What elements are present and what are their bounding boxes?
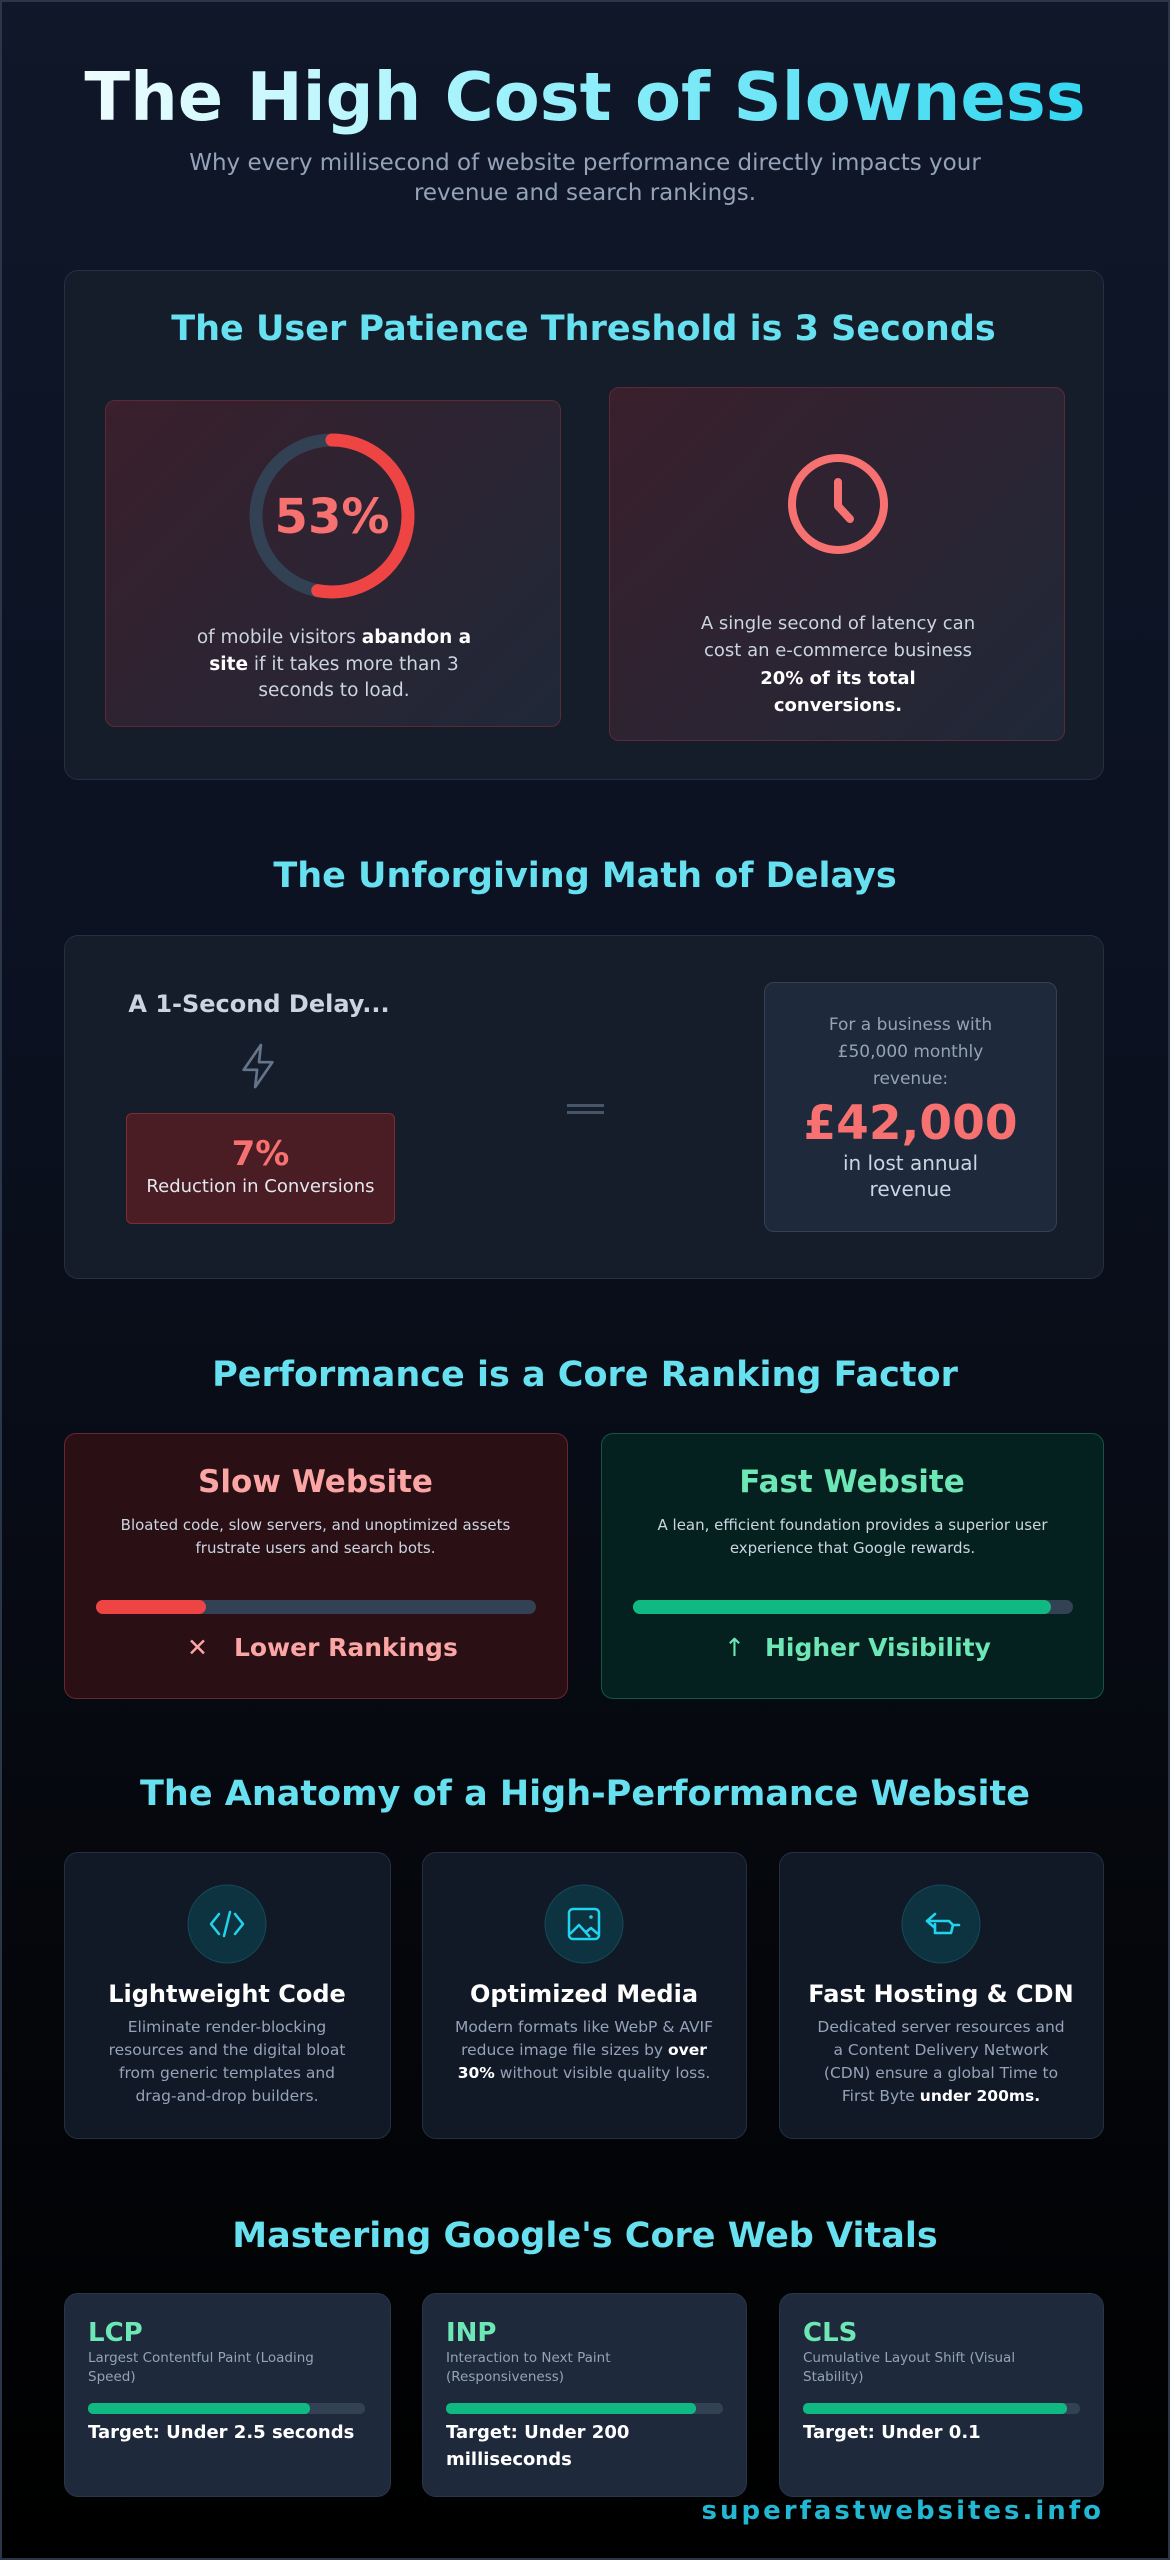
heading: anatomy: The Anatomy of a High-Performance Website	[140, 1774, 1030, 1814]
panel: slow website	[64, 1433, 568, 1699]
label: lower rankings: ✕ Lower Rankings	[187, 1633, 458, 1662]
title: The High Cost of Slowness	[84, 58, 1086, 136]
desc: Eliminate render-blocking resources and the digital bloat from generic templates and drag-and-drop builders.	[109, 2018, 345, 2105]
label: 1-second delay: A 1-Second Delay...	[128, 990, 390, 1018]
icon: server	[902, 1884, 980, 1964]
bar	[803, 2403, 1080, 2414]
title: Optimized Media	[470, 1980, 698, 2008]
target: Target: Under 0.1	[803, 2422, 981, 2443]
icon: bolt	[242, 1044, 274, 1088]
title: Fast Hosting & CDN	[808, 1980, 1074, 2008]
bar	[88, 2403, 365, 2414]
label: LCP	[88, 2318, 143, 2348]
card: optimized media	[422, 1852, 747, 2139]
heading: patience: The User Patience Threshold is 3 Seconds	[171, 309, 996, 349]
bar	[446, 2403, 723, 2414]
stat box: 7%: 7%	[232, 1134, 289, 1174]
subtitle: Why every millisecond of website performance directly impacts your revenue and search rankings.	[189, 150, 981, 206]
text: latency: A single second of latency can cost an e-commerce business 20% of its total conversions.	[701, 613, 975, 716]
icon: image	[544, 1884, 624, 1964]
card: LCP	[64, 2293, 391, 2497]
card: latency	[609, 387, 1065, 741]
label: INP	[446, 2318, 496, 2348]
stat box: 7%	[126, 1113, 395, 1224]
label: higher visibility: ↑ Higher Visibility	[724, 1633, 991, 1662]
desc: Cumulative Layout Shift (Visual Stability)	[803, 2350, 1015, 2385]
card: lightweight code	[64, 1852, 391, 2139]
desc: fast: A lean, efficient foundation provides a superior user experience that Google rewards.	[658, 1516, 1048, 1557]
text: abandon: of mobile visitors abandon a site if it takes more than 3 seconds to load.	[197, 627, 471, 701]
box: lost revenue: £42,000	[803, 1096, 1018, 1151]
desc: Modern formats like WebP & AVIF reduce image file sizes by over 30% without visible quality loss.	[455, 2018, 713, 2082]
title: Lightweight Code	[108, 1980, 346, 2008]
panel: patience threshold	[64, 270, 1104, 780]
target: Target: Under 2.5 seconds	[88, 2422, 354, 2443]
heading: core web vitals: Mastering Google's Core Web Vitals	[232, 2216, 938, 2256]
panel: fast website	[601, 1433, 1104, 1699]
card: INP	[422, 2293, 747, 2497]
desc: slow: Bloated code, slow servers, and unoptimized assets frustrate users and search bots.	[121, 1516, 510, 1557]
box: lost revenue: in lost annual revenue	[843, 1151, 978, 1201]
card: hosting	[779, 1852, 1104, 2139]
donut chart: 53%	[275, 489, 389, 545]
icon: code	[188, 1884, 266, 1964]
heading: math of delays: The Unforgiving Math of Delays	[273, 856, 897, 896]
icon: clock	[788, 454, 888, 554]
card: 53%	[105, 400, 561, 727]
box: lost revenue: For a business with £50,000 monthly revenue:	[829, 1015, 992, 1089]
target: Target: Under 200 milliseconds	[446, 2422, 629, 2470]
desc: Largest Contentful Paint (Loading Speed)	[88, 2350, 314, 2385]
heading: ranking factor: Performance is a Core Ranking Factor	[212, 1355, 958, 1395]
stat box: 7%: Reduction in Conversions	[146, 1176, 375, 1197]
bar: fast	[633, 1600, 1073, 1614]
bar: slow	[96, 1600, 536, 1614]
donut chart	[250, 434, 414, 598]
label: CLS	[803, 2318, 857, 2348]
desc: Interaction to Next Paint (Responsiveness)	[446, 2350, 611, 2385]
icon: equals	[567, 1104, 604, 1114]
title: slow: Slow Website	[198, 1464, 433, 1500]
card: CLS	[779, 2293, 1104, 2497]
title: fast: Fast Website	[739, 1464, 965, 1500]
footer: website url: superfastwebsites.info	[702, 2496, 1104, 2526]
panel: math	[64, 935, 1104, 1279]
box: lost revenue	[764, 982, 1057, 1232]
desc: Dedicated server resources and a Content Delivery Network (CDN) ensure a global Time to First Byte under 200ms.	[817, 2018, 1065, 2105]
